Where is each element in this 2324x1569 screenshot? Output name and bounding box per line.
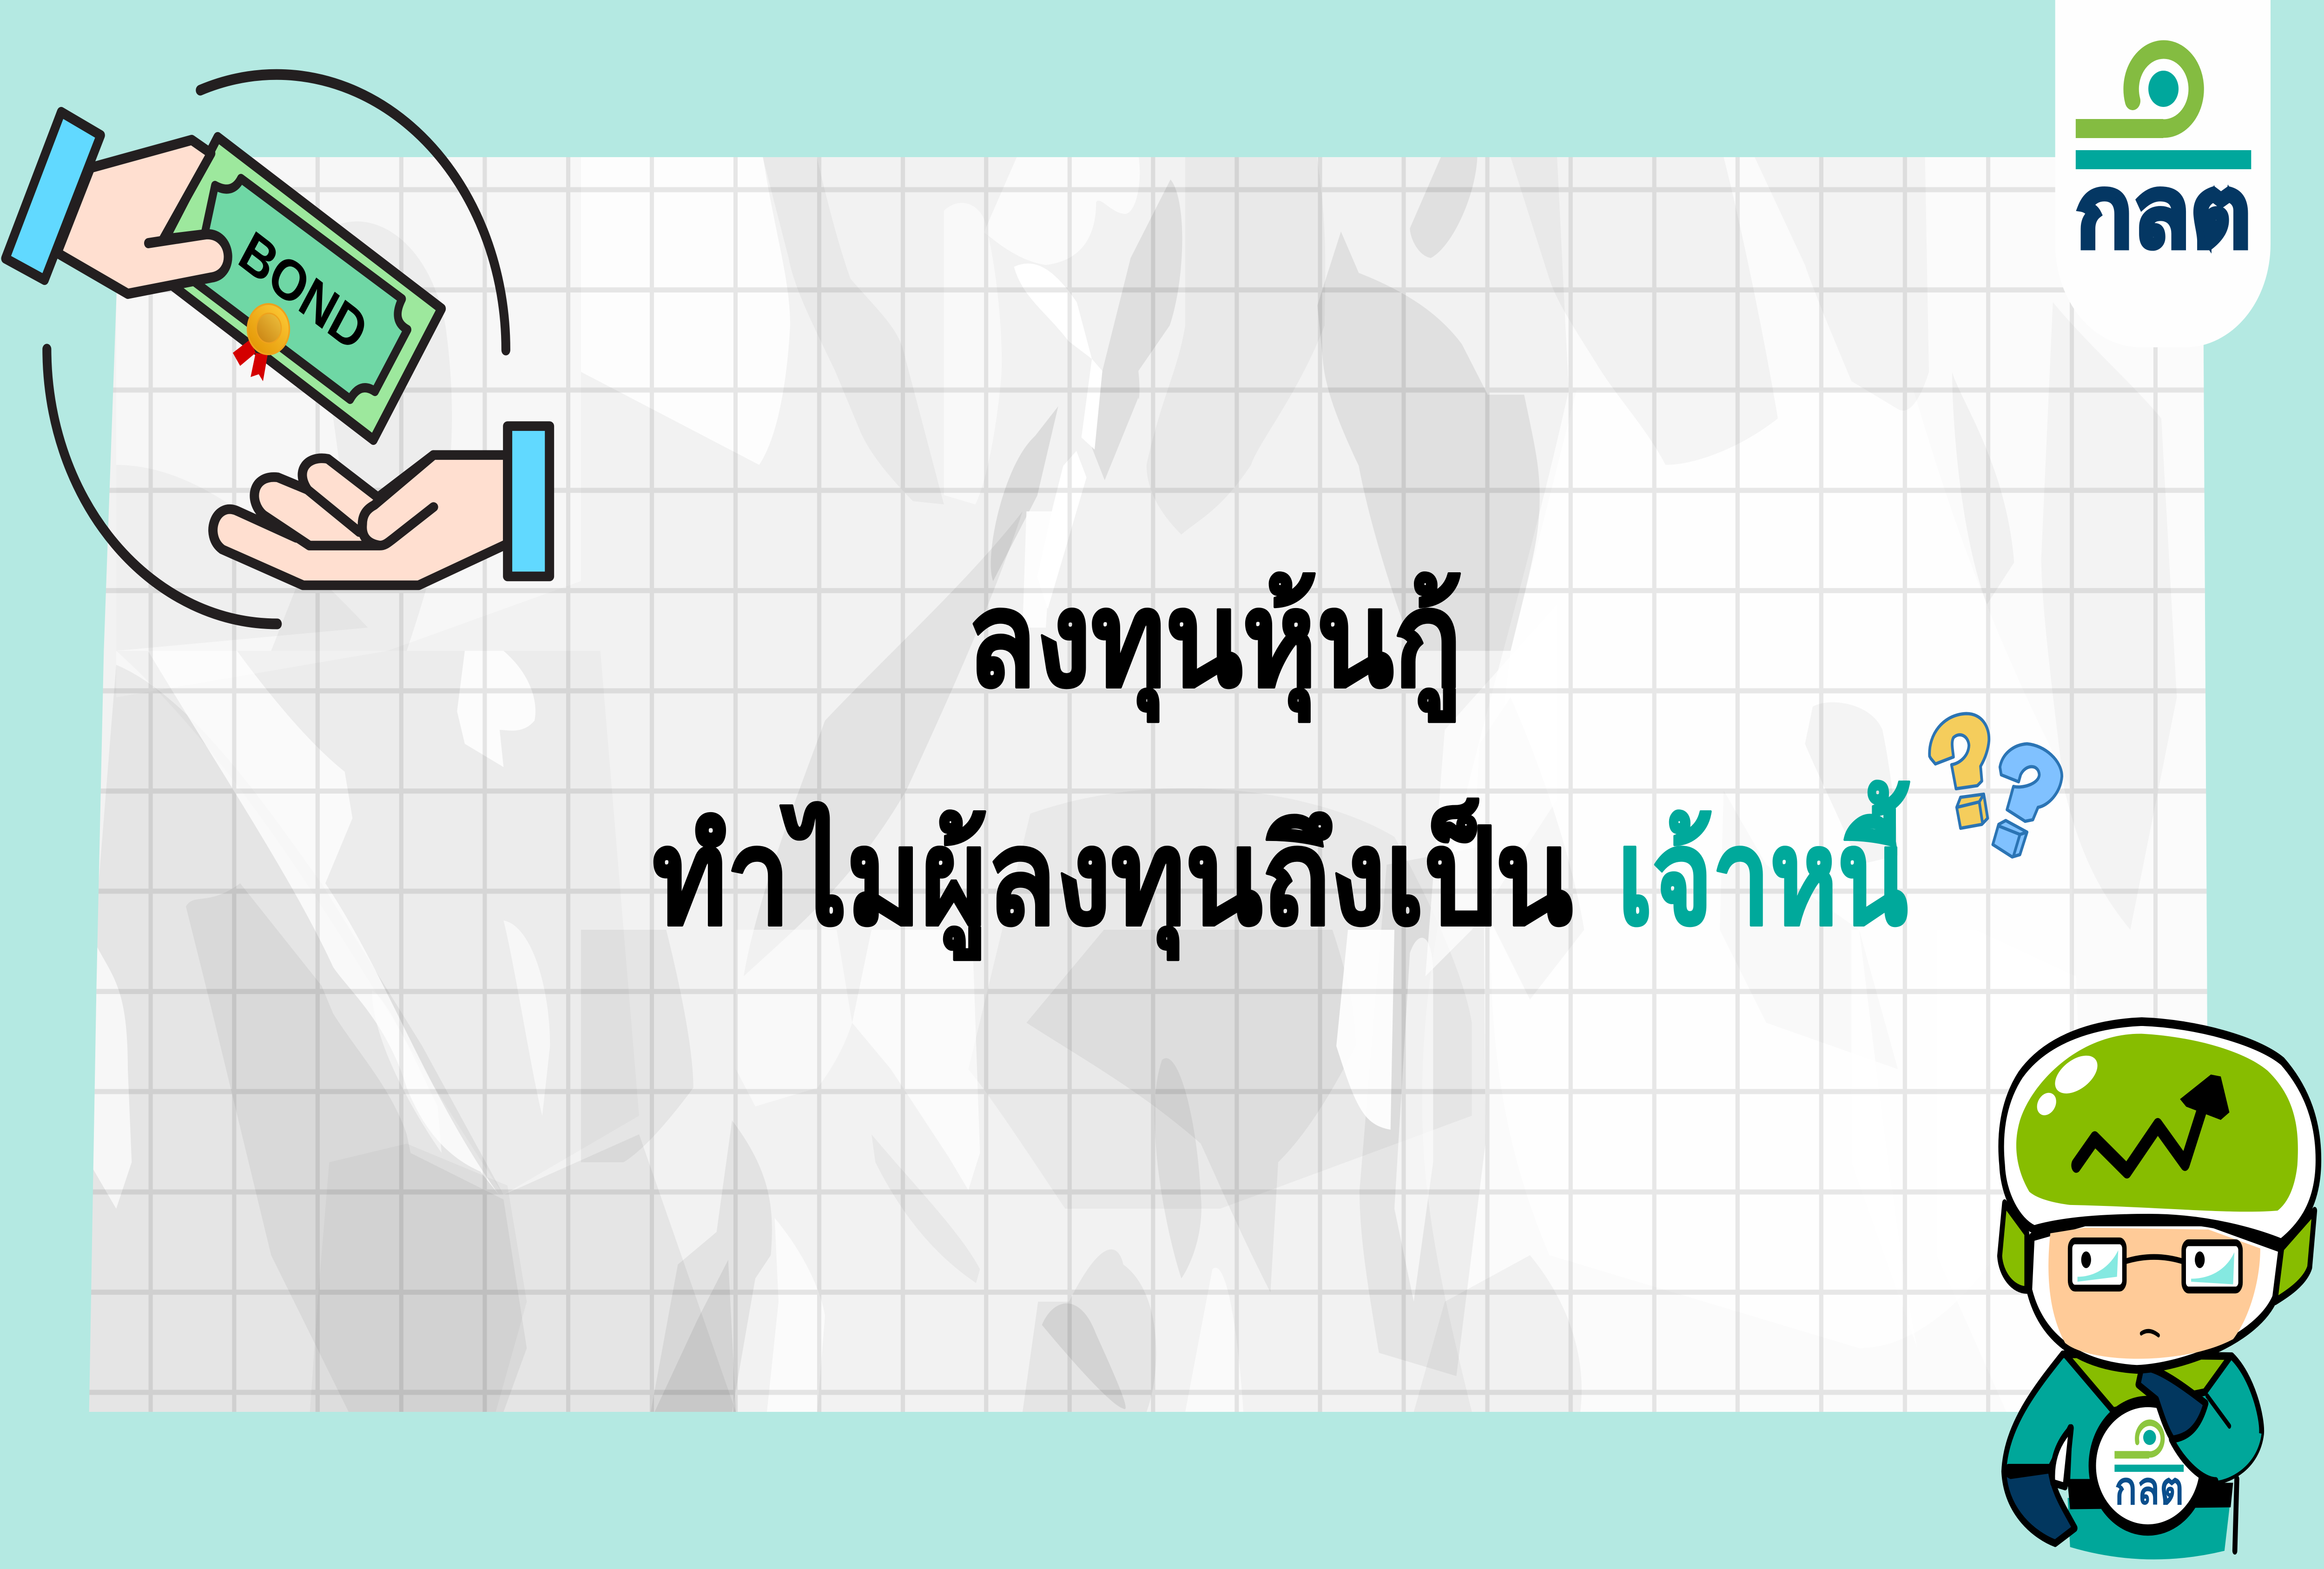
title [653,566,1910,960]
icon: blue question mark [1993,744,2062,857]
right hand receiving [213,426,549,585]
mascot: chest badge: กลต [2114,1463,2184,1514]
title line 1: ลงทุนหุ้นกู้ [967,566,1462,722]
logo tab: SEC Thailand [2055,0,2271,347]
arc: lower [47,349,277,624]
bond note: BOND [230,219,377,364]
illustration: bond changing hands [6,74,549,624]
bond note [150,137,442,440]
left hand giving [6,112,228,294]
mascot: chest badge [2093,1402,2204,1530]
title line 2: black part: ทำไมผู้ลงทุนถึงเป็น [653,797,1573,960]
arc: upper [200,74,506,350]
mascot: thinking character [2000,1022,2318,1559]
icon: question marks [1929,714,2062,857]
mascot: mouth [2141,1331,2159,1335]
paper: white creases [93,359,1504,1412]
medal with ribbon [233,304,289,381]
mascot: rising chart on helmet [2076,1074,2229,1171]
mascot: ear flaps [2000,1203,2027,1290]
paper: grey folds [89,157,2177,1412]
mascot: right forearm and glove [2138,1367,2262,1481]
mascot: lower body [2067,1498,2231,1559]
logo: wordmark: กลต [2076,156,2251,268]
mascot: torso and arms [2004,1354,2262,1483]
icon: yellow question mark [1929,714,1989,828]
mascot: collar [2065,1354,2231,1411]
mascot: glasses [2070,1241,2240,1290]
title line 2: teal part: เจ้าหนี้ [1618,781,1910,952]
mascot: left glove [2004,1470,2075,1543]
paper: grid lines [78,153,2216,1413]
paper: light zones [116,157,2208,1412]
mascot: belt [2067,1483,2233,1509]
logo: green swirl [2131,50,2196,129]
panel: crumpled grid paper [78,153,2216,1413]
mascot: face [2029,1222,2281,1370]
mascot: helmet [2001,1022,2318,1243]
